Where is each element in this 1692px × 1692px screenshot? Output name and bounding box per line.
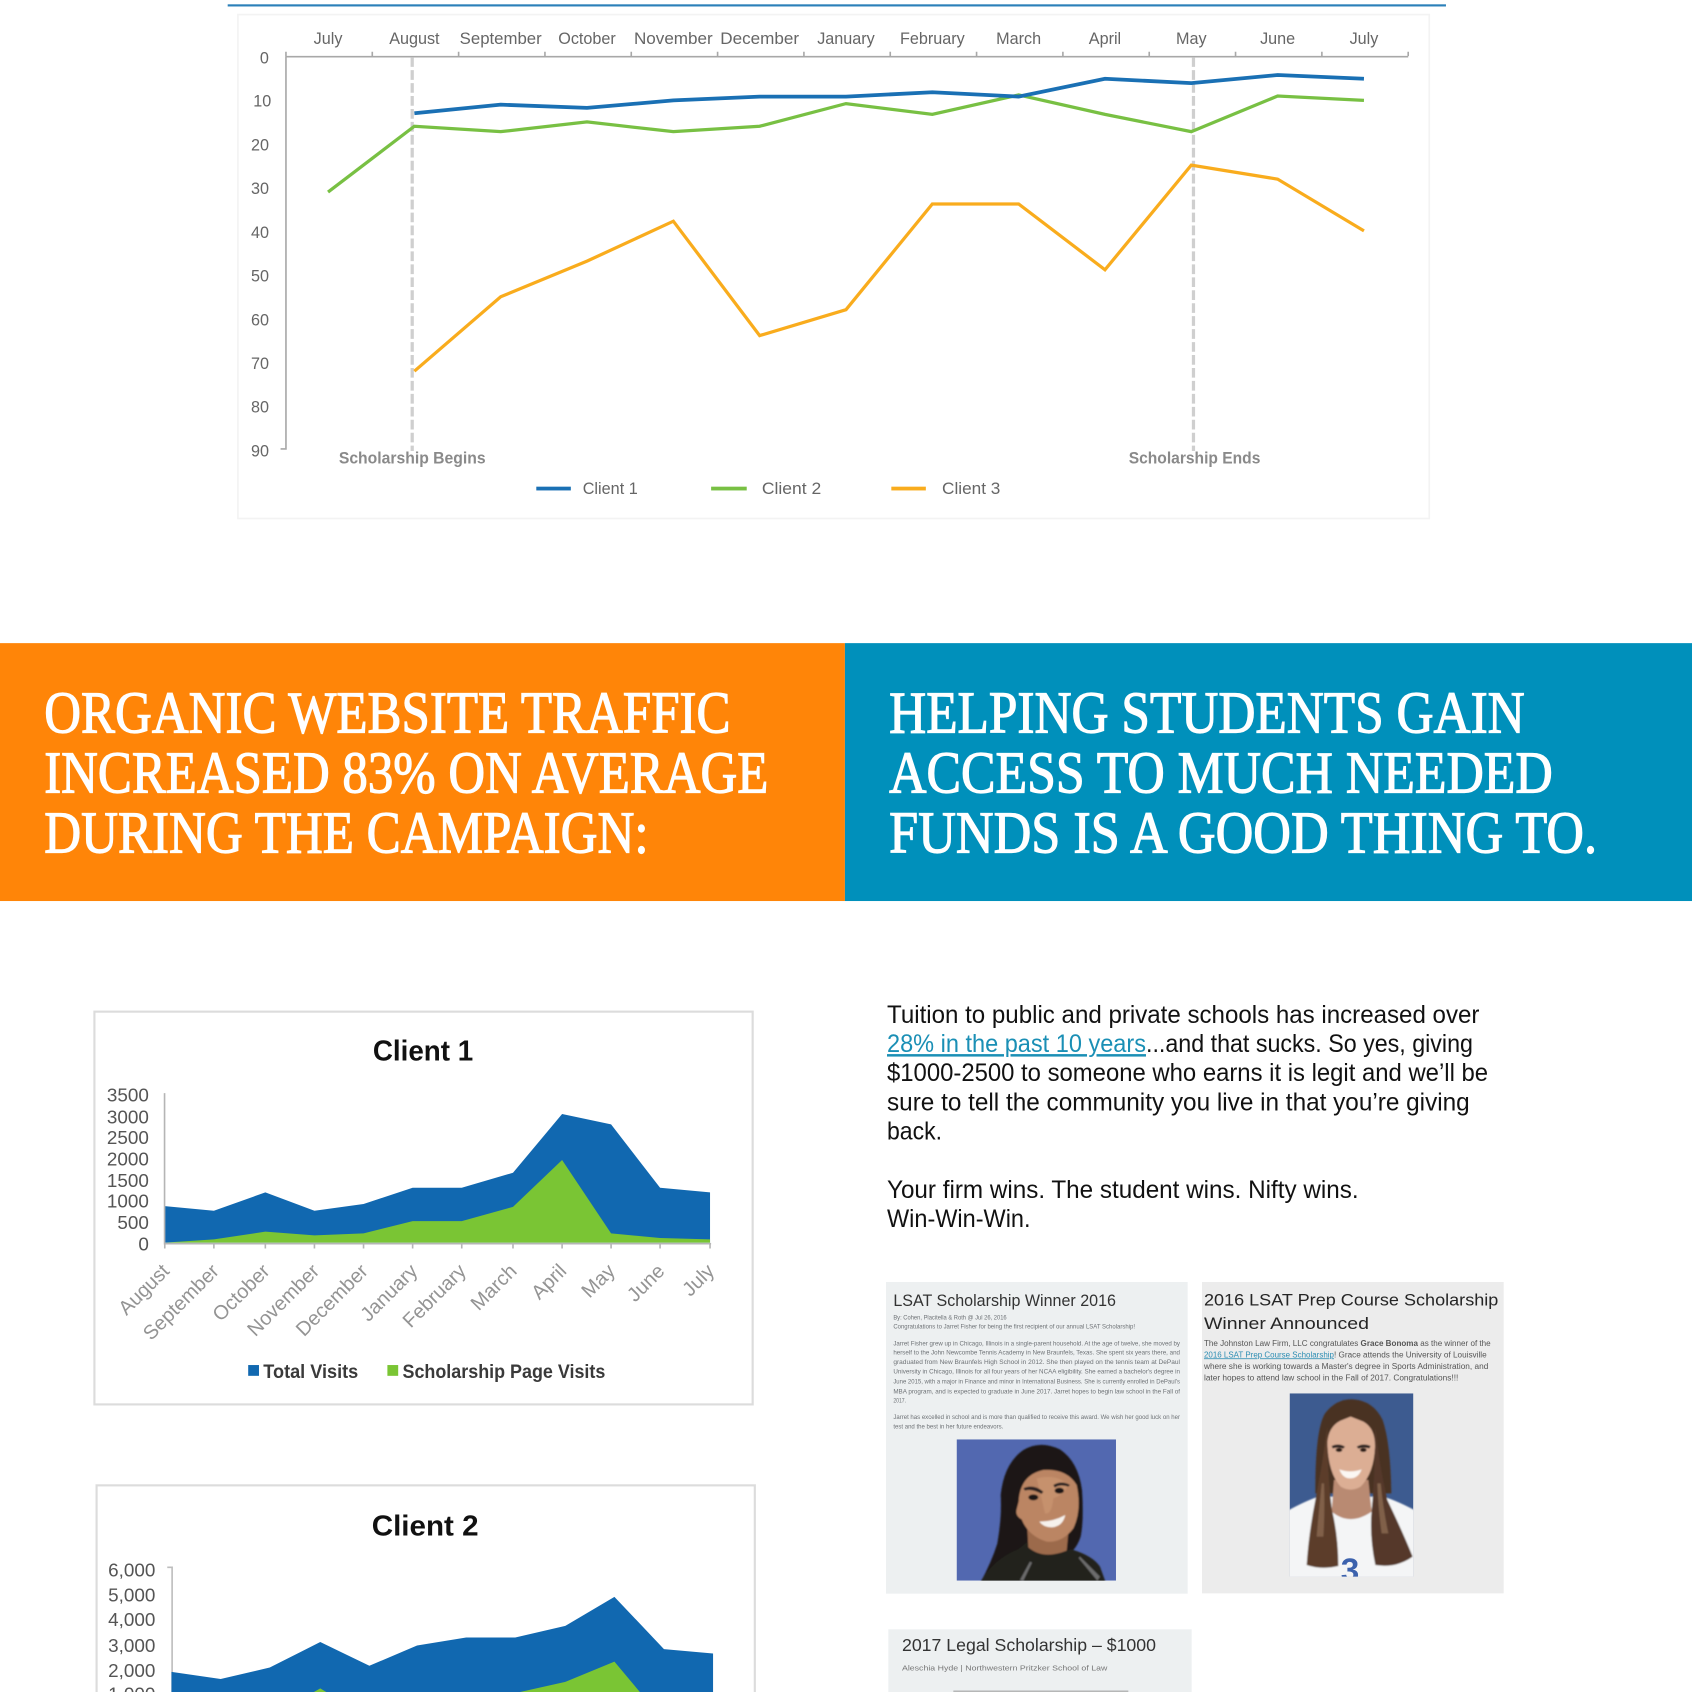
card 1 title: LSAT Scholarship Winner 2016 xyxy=(893,1291,1116,1310)
client 1 month labels: January xyxy=(356,1260,422,1326)
client 1 value axis labels: 3000 xyxy=(107,1107,149,1128)
photo: scholarship winner Grace Bonoma xyxy=(1290,1393,1414,1577)
rank axis labels: 20 xyxy=(251,137,269,155)
card 1 article text: University in Chicago, Illinois for all four years of her NCAA eligibility. She earned a bachelor's degree in xyxy=(893,1370,1180,1376)
card 2 title: Winner Announced xyxy=(1204,1314,1369,1333)
body text block: back. xyxy=(887,1119,942,1146)
panel: client 2 area chart xyxy=(97,1485,755,1692)
month labels: April xyxy=(1089,30,1121,48)
banner: helping students: HELPING STUDENTS GAIN xyxy=(889,680,1525,746)
client 1 value axis labels xyxy=(107,1086,149,1256)
month labels: July xyxy=(1350,30,1379,48)
month labels: May xyxy=(1176,30,1207,48)
client 1 month labels: March xyxy=(467,1260,521,1315)
photo: scholarship winner Jarret Fisher xyxy=(957,1439,1116,1585)
banner: organic traffic: DURING THE CAMPAIGN: xyxy=(44,799,649,865)
client 2 value axis labels: 4,000 xyxy=(108,1610,155,1631)
client 1 month labels: November xyxy=(243,1260,324,1341)
card 2 title: 2016 LSAT Prep Course Scholarship xyxy=(1204,1291,1498,1310)
top rule xyxy=(228,4,1446,6)
client 1 value axis labels: 0 xyxy=(138,1235,149,1256)
rank axis labels xyxy=(251,50,271,460)
client 1 legend: Total Visits xyxy=(263,1361,358,1383)
card 1 article text: Congratulations to Jarret Fisher for being the first recipient of our annual LSAT Scholarship! xyxy=(893,1324,1135,1330)
client 2 value axis labels: 5,000 xyxy=(108,1585,155,1606)
client 1 value axis labels: 500 xyxy=(117,1213,149,1234)
card 2 title xyxy=(1204,1291,1498,1333)
banner: organic traffic: ORGANIC WEBSITE TRAFFIC xyxy=(44,680,731,746)
client 1 legend xyxy=(248,1361,605,1383)
month labels: July xyxy=(314,30,343,48)
body text block: Your firm wins. The student wins. Nifty wins. xyxy=(887,1177,1359,1204)
rank axis labels: 50 xyxy=(251,268,269,286)
body text block xyxy=(887,1002,1488,1233)
rank axis labels: 90 xyxy=(251,442,269,460)
panel: client 1 area chart xyxy=(94,1012,753,1404)
line chart legend: Client 2 xyxy=(762,479,821,498)
card 1 article text: Jarret has excelled in school and is more than qualified to receive this award. We wish her good luck on her xyxy=(893,1415,1180,1421)
client 1 title: Client 1 xyxy=(373,1036,473,1068)
card 3 title: 2017 Legal Scholarship – $1000 xyxy=(902,1635,1156,1655)
client 1 axes xyxy=(165,1093,711,1248)
client 2 scholarship page visits area xyxy=(291,1662,651,1692)
panel: scholarship winner card 2 xyxy=(1202,1282,1504,1593)
card 1 article text: graduated from New Braunfels High School in 2012. She then played on the tennis team at DePaul xyxy=(893,1360,1180,1366)
client 1 value axis labels: 1000 xyxy=(107,1191,149,1212)
card 1 article text: 2017. xyxy=(893,1399,906,1405)
body text block: $1000-2500 to someone who earns it is legit and we’ll be xyxy=(887,1060,1488,1087)
card 1 article text: MBA program, and is expected to graduate in June 2017. Jarret hopes to begin law school in the Fall of xyxy=(893,1389,1180,1395)
client 1 value axis labels: 2000 xyxy=(107,1149,149,1170)
card 1 article text: herself to the John Newcombe Tennis Academy in New Braunfels, Texas. She spent six years there, and xyxy=(893,1351,1180,1357)
client 1 month labels xyxy=(115,1260,719,1345)
rank axis labels: 60 xyxy=(251,311,269,329)
card 2 article text: where she is working towards a Master's degree in Sports Administration, and xyxy=(1203,1362,1488,1371)
line: client 2 xyxy=(328,95,1364,192)
line chart legend xyxy=(536,479,1000,498)
body text block: sure to tell the community you live in that you’re giving xyxy=(887,1089,1470,1116)
line chart legend: Client 3 xyxy=(942,479,1000,498)
month labels: February xyxy=(900,30,966,48)
client 1 month labels: August xyxy=(115,1260,174,1320)
card 3 photo top edge xyxy=(953,1691,1128,1692)
month labels: March xyxy=(996,30,1041,48)
jersey number: 3 xyxy=(1341,1553,1359,1590)
rank axis labels: 80 xyxy=(251,399,269,417)
panel: scholarship winner card 3 xyxy=(888,1629,1192,1692)
line chart legend: Client 1 xyxy=(583,479,638,498)
line: client 3 xyxy=(414,165,1364,371)
client 1 month labels: December xyxy=(292,1260,373,1341)
client 2 total visits area xyxy=(171,1597,713,1692)
card 1 article text: By: Cohen, Placitella & Roth @ Jul 26, 2016 xyxy=(893,1315,1007,1321)
line: client 1 xyxy=(414,75,1364,113)
rank axis labels: 30 xyxy=(251,180,269,198)
month labels: November xyxy=(634,30,713,48)
body text block: 28% in the past 10 years xyxy=(887,1031,1146,1058)
month labels xyxy=(314,30,1379,48)
client 1 month labels: June xyxy=(623,1260,669,1306)
month labels: January xyxy=(817,30,876,48)
panel: ranking line chart xyxy=(238,15,1429,518)
client 1 month labels: July xyxy=(678,1260,719,1301)
client 1 total visits area xyxy=(165,1114,710,1243)
rank axis labels: 10 xyxy=(253,92,271,110)
client 2 value axis labels: 2,000 xyxy=(108,1661,155,1682)
banner: organic traffic xyxy=(0,643,845,901)
client 2 title: Client 2 xyxy=(372,1511,479,1543)
card 1 article text: June 2015, with a major in Finance and minor in International Business. She is currently enrolled in DePaul's xyxy=(893,1380,1180,1386)
client 2 value axis labels: 3,000 xyxy=(108,1636,155,1657)
banner: organic traffic: INCREASED 83% ON AVERAGE xyxy=(44,740,768,806)
marker label: scholarship ends: Scholarship Ends xyxy=(1129,448,1260,467)
client 1 legend: Scholarship Page Visits xyxy=(402,1361,605,1383)
card 3 byline: Aleschia Hyde | Northwestern Pritzker School of Law xyxy=(902,1664,1108,1673)
month labels: June xyxy=(1260,30,1295,48)
client 1 scholarship page visits area xyxy=(165,1160,710,1243)
month labels: October xyxy=(558,30,616,48)
client 1 value axis labels: 3500 xyxy=(107,1086,149,1107)
card 1 article text: test and the best in her future endeavors. xyxy=(893,1425,1004,1431)
client 1 month labels: September xyxy=(139,1260,224,1345)
card 1 article text: Jarret Fisher grew up in Chicago, Illinois in a single-parent household. At the age of twelve, she moved by xyxy=(893,1341,1180,1347)
client 1 value axis labels: 1500 xyxy=(107,1171,149,1192)
banner: helping students: ACCESS TO MUCH NEEDED xyxy=(889,740,1553,806)
rank axis labels: 70 xyxy=(251,355,269,373)
banner: helping students: FUNDS IS A GOOD THING TO. xyxy=(889,799,1597,865)
card 1 article text xyxy=(893,1315,1180,1431)
client 2 axis xyxy=(167,1567,172,1692)
client 2 value axis labels xyxy=(108,1561,155,1692)
client 1 month labels: May xyxy=(577,1260,620,1302)
scholarship period markers xyxy=(412,57,1193,451)
body text block: Win-Win-Win. xyxy=(887,1206,1031,1233)
body text block: Tuition to public and private schools has increased over xyxy=(887,1002,1479,1029)
client 2 value axis labels: 6,000 xyxy=(108,1561,155,1582)
banner: helping students xyxy=(845,643,1692,901)
chart axes xyxy=(281,52,1408,449)
month labels: August xyxy=(389,30,440,48)
marker label: scholarship begins: Scholarship Begins xyxy=(339,448,486,467)
body text block: ...and that sucks. So yes, giving xyxy=(1146,1031,1473,1058)
panel: scholarship winner card 1 xyxy=(886,1282,1188,1594)
client 1 month labels: October xyxy=(209,1260,275,1326)
month labels: September xyxy=(460,30,542,48)
card 2 article text: ! Grace attends the University of Louisville xyxy=(1334,1350,1487,1359)
card 2 article text xyxy=(1203,1339,1491,1382)
rank axis labels: 40 xyxy=(251,224,269,242)
card 2 article text: The Johnston Law Firm, LLC congratulates Grace Bonoma as the winner of the xyxy=(1204,1339,1491,1348)
client 1 value axis labels: 2500 xyxy=(107,1128,149,1149)
client 1 month labels: April xyxy=(527,1260,571,1304)
card 2 article text: later hopes to attend law school in the Fall of 2017. Congratulations!!! xyxy=(1204,1373,1458,1382)
card 2 article text: 2016 LSAT Prep Course Scholarship xyxy=(1204,1350,1335,1359)
month labels: December xyxy=(720,30,800,48)
client 1 month labels: February xyxy=(399,1260,471,1332)
rank axis labels: 0 xyxy=(260,50,269,68)
